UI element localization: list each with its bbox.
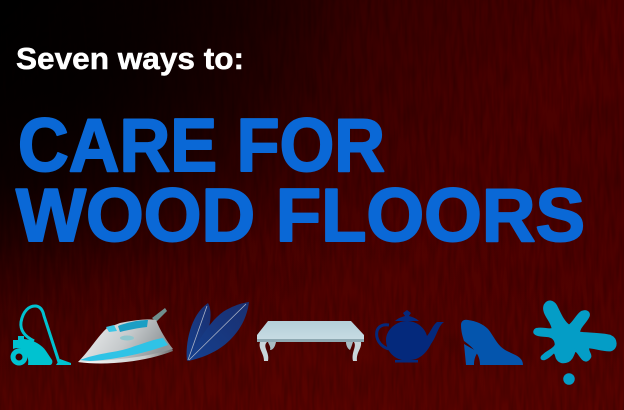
icon: feathers <box>187 302 249 361</box>
icon: teapot <box>377 310 444 362</box>
icon: vacuum cleaner <box>10 306 71 366</box>
title: WOOD FLOORS <box>16 173 585 257</box>
title: CARE FOR <box>18 103 385 187</box>
icon: coffee table <box>257 321 364 361</box>
subtitle: Seven ways to: <box>16 41 244 76</box>
icon: paint splash <box>535 302 615 384</box>
title <box>16 103 585 257</box>
icon: clothes iron <box>78 308 173 364</box>
icon: high-heel shoe <box>461 320 523 365</box>
